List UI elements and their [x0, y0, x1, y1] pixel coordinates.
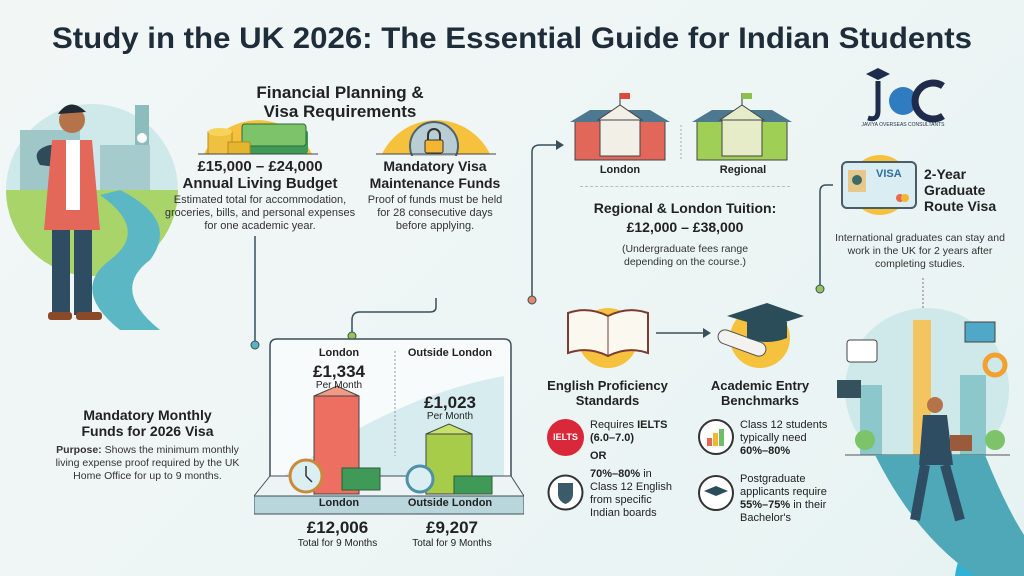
heading: graduate route visa: 2-Year — [924, 166, 966, 182]
text block: maintenance funds: Proof of funds must be held for 28 consecutive days before applying. — [368, 194, 502, 232]
heading: financial planning — [256, 83, 424, 121]
icon: money stack — [198, 120, 318, 154]
text block: annual living budget: Estimated total for accommodation, groceries, bills, and personal expenses for one academic year. — [165, 194, 355, 232]
text block: academic benchmarks: Postgraduate applicants require 55%–75% in their Bachelor's — [740, 473, 827, 524]
text block: IELTS requirement: OR — [590, 450, 606, 462]
illustration: student with London skyline — [6, 104, 178, 330]
chart: monthly funds comparison: London — [319, 497, 359, 509]
text block: tuition — [580, 186, 790, 269]
icon: universities — [570, 93, 792, 160]
icon: cap circle — [698, 475, 734, 511]
labels: London / Regional: London — [600, 164, 640, 176]
text block: tuition: depending on the course.) — [624, 256, 746, 268]
heading: academic entry: Academic Entry — [711, 378, 809, 393]
text block: mandatory monthly funds — [56, 407, 240, 482]
text: Regional — [720, 164, 766, 176]
text block: mandatory monthly funds: Mandatory Monthly — [83, 407, 212, 423]
heading: graduate route visa — [924, 166, 996, 214]
chart: monthly funds comparison: £1,334 — [313, 362, 365, 381]
heading: academic entry — [711, 378, 809, 408]
text block: mandatory monthly funds: Funds for 2026 Visa — [81, 423, 214, 439]
heading: financial planning: Visa Requirements — [264, 102, 416, 121]
chart: monthly funds comparison: Per Month — [316, 380, 362, 391]
illustration: graduate walking in city — [837, 308, 1024, 576]
logo: JAVIYA OVERSEAS CONSULTANTS — [862, 122, 945, 128]
text block: academic benchmarks: Class 12 students typically need 60%–80% — [740, 419, 827, 457]
logo — [862, 68, 945, 128]
chart: monthly funds comparison: Per Month — [427, 411, 473, 422]
heading: english proficiency — [547, 378, 668, 408]
icon: visa card — [841, 155, 917, 215]
chart: monthly funds comparison — [254, 338, 524, 514]
text block: maintenance funds — [368, 158, 502, 232]
icon: bar chart — [698, 419, 734, 455]
totals — [298, 518, 377, 549]
bar: Outside London — [426, 424, 472, 494]
text block: academic benchmarks — [740, 419, 827, 524]
icon: book — [567, 308, 649, 368]
text block: annual living budget — [165, 158, 355, 232]
IELTS badge — [547, 419, 584, 456]
chart: monthly funds comparison: Outside London — [408, 497, 492, 509]
text block: mandatory monthly funds: Purpose: Shows the minimum monthly living expense proof required by the UK Home Office for up to 9 months. — [56, 444, 239, 482]
heading: academic entry: Benchmarks — [721, 393, 799, 408]
heading: english proficiency: Standards — [576, 393, 639, 408]
text block: annual living budget: £15,000 – £24,000 — [197, 158, 323, 175]
text block: annual living budget: Annual Living Budget — [182, 175, 338, 192]
text block: maintenance funds: Maintenance Funds — [370, 175, 500, 191]
heading: graduate route visa: Route Visa — [924, 198, 996, 214]
heading: english proficiency: English Proficiency — [547, 378, 668, 393]
totals: Total for 9 Months — [298, 538, 377, 549]
title: Study in the UK 2026: The Essential Guide for Indian Students — [52, 22, 972, 55]
totals: £12,006 — [307, 518, 368, 537]
icon: safe with lock — [376, 120, 496, 156]
text: £9,207 — [426, 518, 478, 537]
IELTS badge: IELTS — [553, 432, 578, 442]
text block: IELTS requirement: Requires IELTS (6.0–7.0) 70%–80% in Class 12 English from specific Indian boards — [590, 419, 672, 519]
heading: graduate route visa: Graduate — [924, 182, 985, 198]
text block: tuition: (Undergraduate fees range — [622, 243, 748, 255]
icon: school crest — [548, 474, 584, 510]
text: Total for 9 Months — [412, 538, 492, 549]
text block: tuition: £12,000 – £38,000 — [627, 219, 743, 235]
icon: visa card: VISA — [876, 168, 902, 180]
icon: graduation cap — [718, 303, 804, 368]
heading: financial planning: Financial Planning & — [256, 83, 424, 102]
bar: London — [314, 386, 359, 494]
chart: monthly funds comparison: London — [319, 347, 359, 359]
text block: graduate route: International graduates can stay and work in the UK for 2 years after completing studies. — [835, 232, 1005, 270]
chart: monthly funds comparison: £1,023 — [424, 393, 476, 412]
text block: maintenance funds: Mandatory Visa — [383, 158, 487, 174]
chart: monthly funds comparison: Outside London — [408, 347, 492, 359]
text block: tuition: Regional & London Tuition: — [594, 200, 776, 216]
